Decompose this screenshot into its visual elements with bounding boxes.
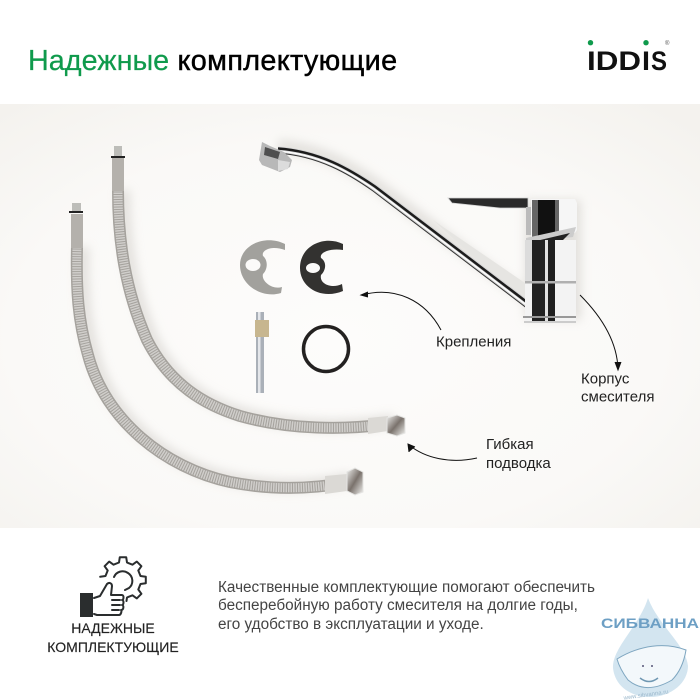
- description text: бесперебойную работу смесителя на долгие годы,: [218, 597, 578, 614]
- title: Надежные комплектующие: [28, 45, 397, 77]
- label: faucet body: смесителя: [581, 388, 654, 406]
- faucet: lever: [448, 198, 528, 208]
- label: flexible hose: Гибкая: [486, 436, 534, 453]
- arrow: hose: [408, 444, 477, 460]
- soft shadows: [83, 146, 581, 485]
- rubber ring: [304, 326, 348, 372]
- mounting plates: [240, 240, 343, 294]
- watermark: sibvanna: [601, 598, 699, 700]
- watermark: sibvanna: СИБВАННА: [601, 616, 699, 631]
- hose: outer: [69, 203, 363, 495]
- label: fittings: Крепления: [436, 334, 511, 350]
- faucet: spout: [259, 142, 530, 309]
- panel: product photo: [0, 104, 700, 528]
- arrow: body: [580, 295, 621, 370]
- icon caption: НАДЕЖНЫЕ: [71, 620, 155, 636]
- stud bolt: [255, 312, 269, 393]
- icon caption: КОМПЛЕКТУЮЩИЕ: [47, 638, 179, 654]
- arrow: fittings: [361, 292, 441, 330]
- description text: [218, 578, 595, 633]
- hose: inner: [111, 146, 405, 436]
- logo: iddis: [587, 40, 670, 74]
- description text: Качественные комплектующие помогают обеспечить: [218, 578, 595, 596]
- faucet: body: [523, 199, 577, 323]
- logo: iddis: ®: [665, 40, 670, 47]
- label: flexible hose: подводка: [486, 455, 551, 472]
- icon: thumb and gear: [80, 556, 147, 617]
- label: faucet body: Корпус: [581, 370, 630, 388]
- icon caption: [47, 620, 179, 656]
- description text: его удобство в эксплуатации и уходе.: [218, 616, 484, 633]
